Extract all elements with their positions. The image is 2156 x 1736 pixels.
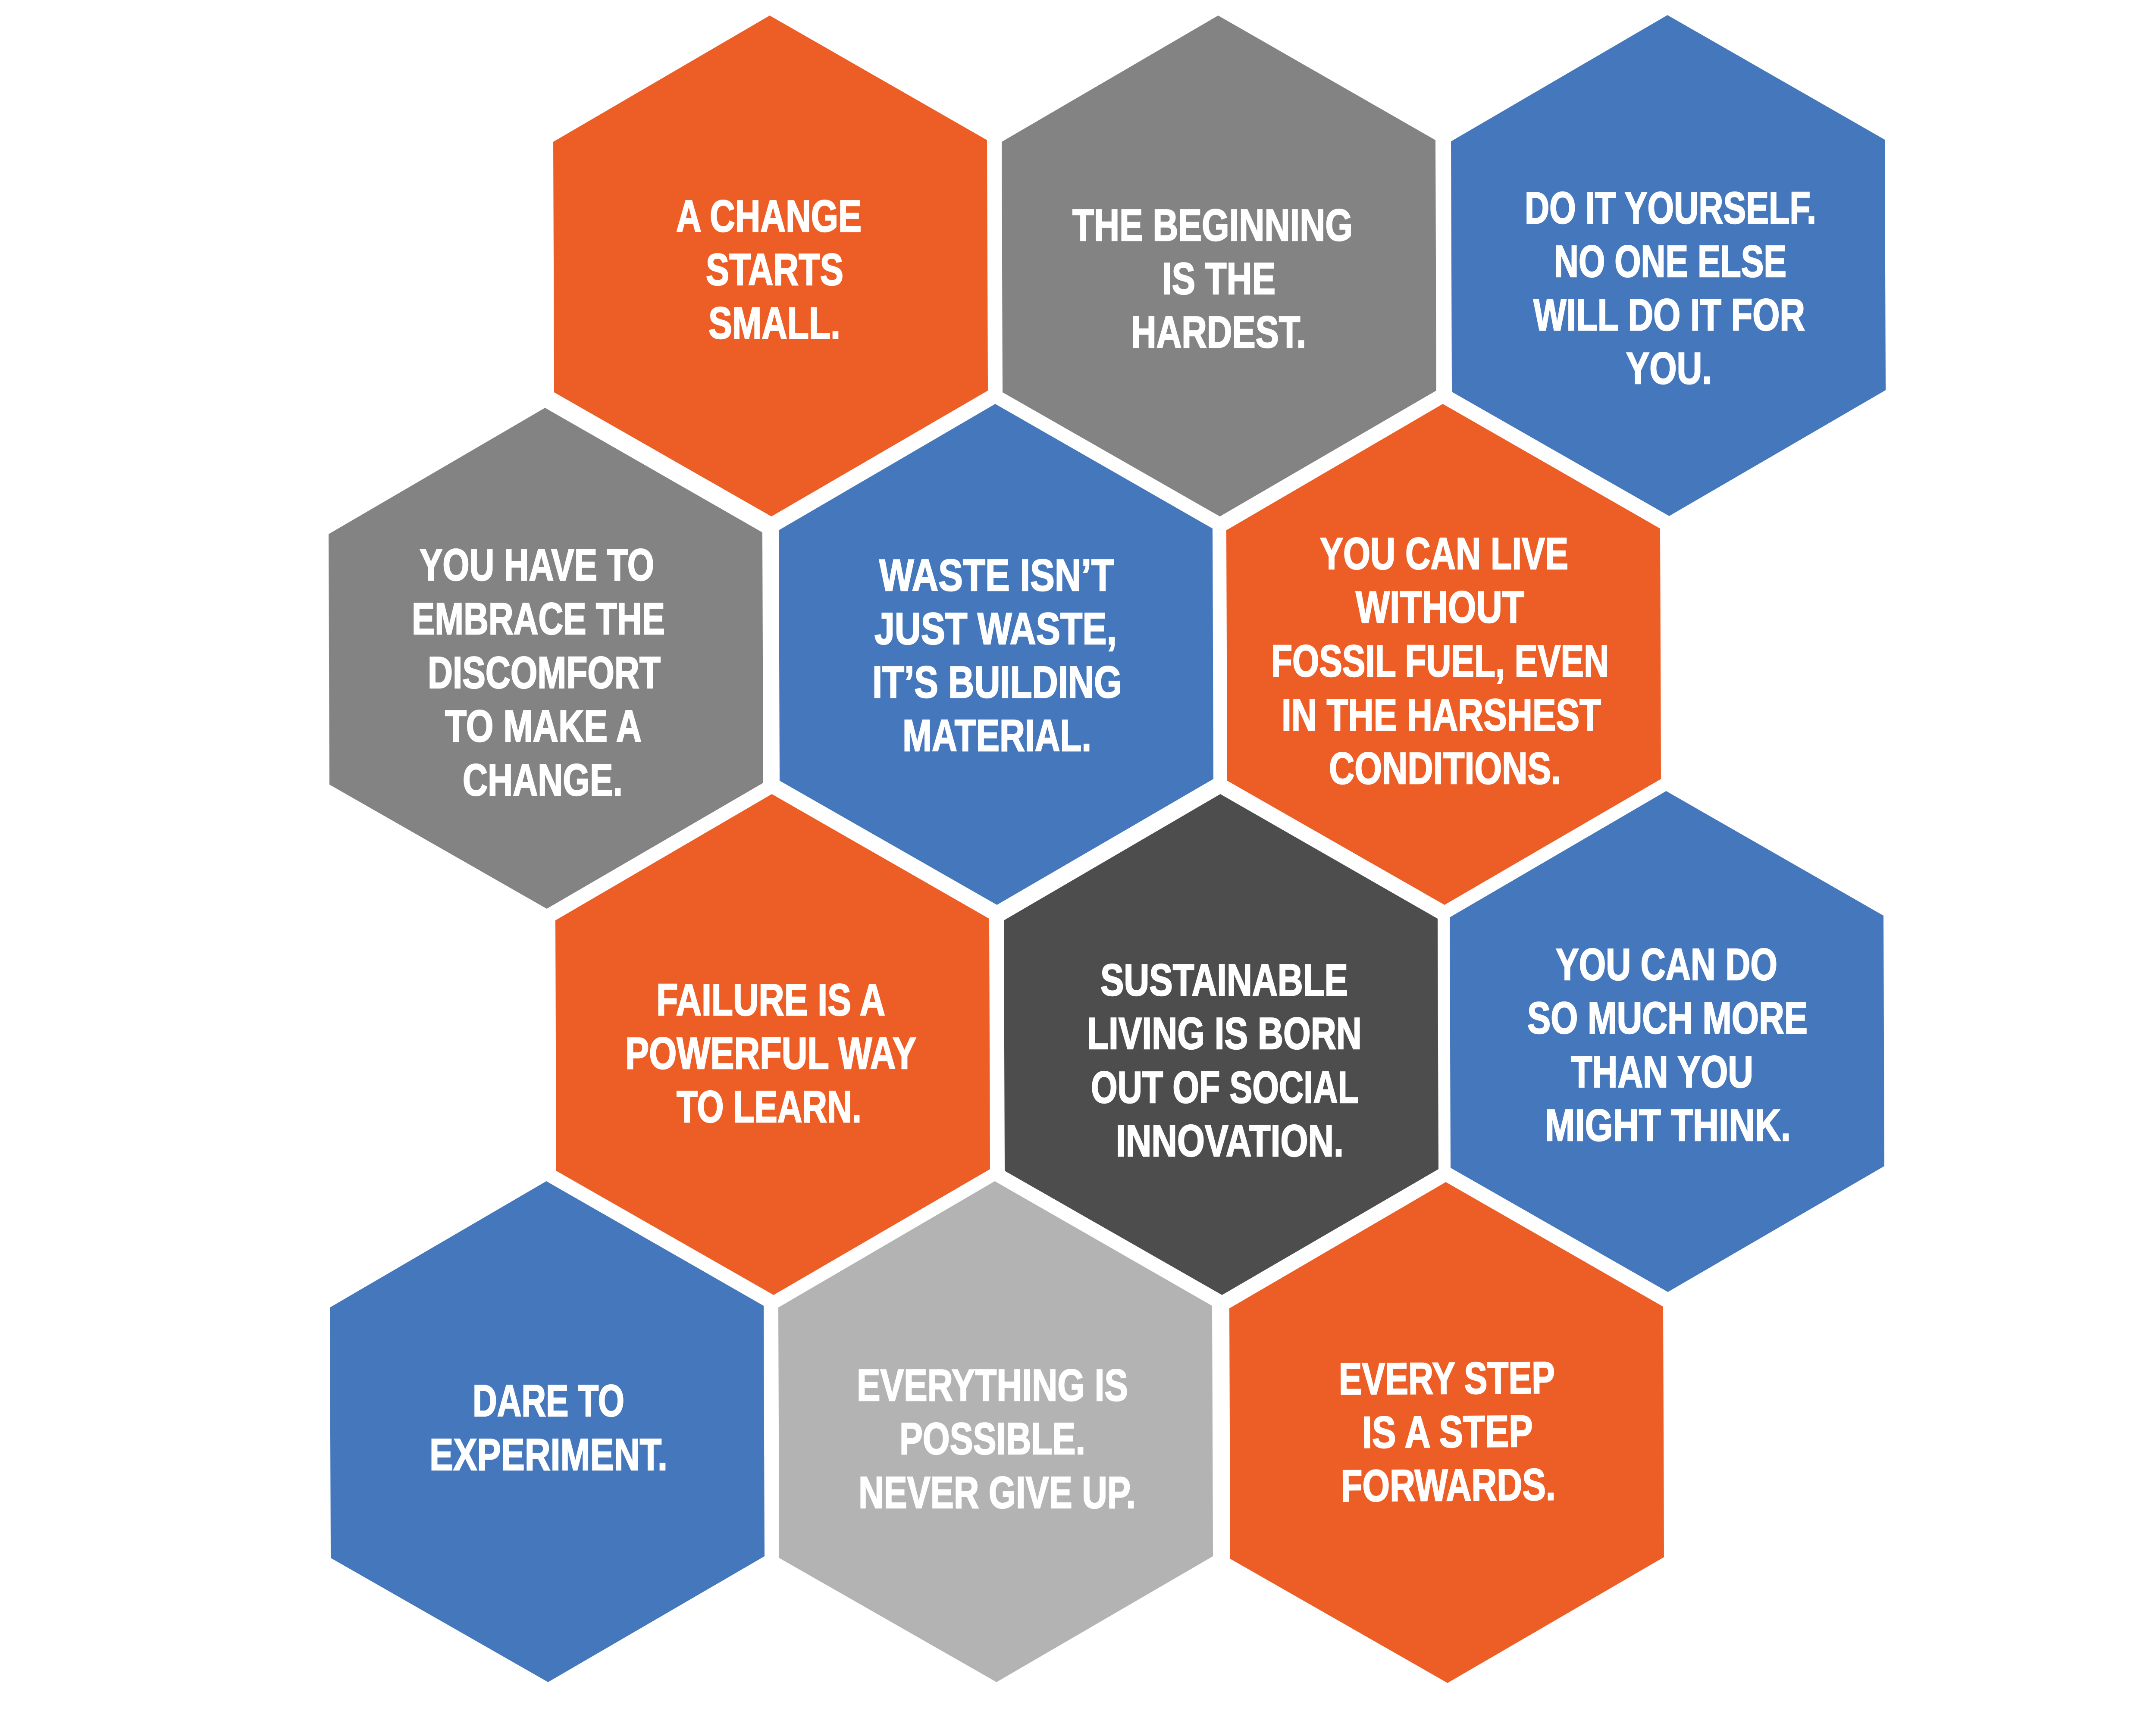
- text: live without fossil fuel: IN THE HARSHEST: [1282, 690, 1601, 740]
- text: dare to experiment: DARE TO: [473, 1376, 624, 1426]
- text: a change starts small: A CHANGE: [676, 191, 862, 241]
- text: sustainable living: SUSTAINABLE: [1100, 955, 1348, 1005]
- text: live without fossil fuel: [1271, 529, 1609, 794]
- text: every step is a step forwards: IS A STEP: [1362, 1407, 1533, 1458]
- text: the beginning is the hardest: IS THE: [1162, 254, 1275, 304]
- text: do it yourself: NO ONE ELSE: [1554, 237, 1786, 287]
- text: embrace the discomfort: DISCOMFORT: [428, 648, 661, 698]
- text: everything is possible: POSSIBLE.: [899, 1414, 1085, 1464]
- panel: sustainable living: [1004, 794, 1438, 1295]
- text: every step is a step forwards: [1338, 1353, 1556, 1511]
- panel: waste is building material: [779, 404, 1213, 905]
- text: the beginning is the hardest: THE BEGINNING: [1072, 200, 1353, 250]
- text: you can do so much more: SO MUCH MORE: [1527, 993, 1808, 1043]
- text: everything is possible: EVERYTHING IS: [857, 1361, 1128, 1411]
- text: everything is possible: NEVER GIVE UP.: [859, 1468, 1136, 1518]
- text: sustainable living: LIVING IS BORN: [1087, 1009, 1362, 1059]
- hexagon: blue: [1450, 791, 1884, 1292]
- hexagon: blue: [1451, 15, 1886, 516]
- text: waste is building material: MATERIAL.: [903, 711, 1091, 761]
- text: embrace the discomfort: CHANGE.: [463, 755, 623, 805]
- panel: a change starts small: [553, 16, 988, 516]
- text: sustainable living: [1087, 955, 1362, 1166]
- text: dare to experiment: EXPERIMENT.: [429, 1430, 667, 1480]
- hexagon: blue: [330, 1181, 765, 1682]
- text: the beginning is the hardest: HARDEST.: [1131, 307, 1306, 357]
- text: you can do so much more: YOU CAN DO: [1556, 940, 1777, 990]
- hexagon: blue: [779, 404, 1213, 905]
- text: embrace the discomfort: TO MAKE A: [445, 701, 642, 751]
- text: failure is a way to learn: [625, 975, 916, 1132]
- text: sustainable living: OUT OF SOCIAL: [1091, 1063, 1359, 1113]
- text: everything is possible: [857, 1361, 1136, 1518]
- hexagon: orange: [1229, 1182, 1664, 1683]
- text: failure is a way to learn: POWERFUL WAY: [625, 1029, 916, 1079]
- text: waste is building material: JUST WASTE,: [874, 604, 1117, 654]
- text: do it yourself: [1525, 183, 1816, 394]
- text: sustainable living: INNOVATION.: [1116, 1116, 1344, 1166]
- hexagon: gray: [1002, 16, 1436, 516]
- text: a change starts small: SMALL.: [708, 298, 840, 348]
- text: do it yourself: YOU.: [1626, 344, 1712, 394]
- panel: the beginning is the hardest: [1002, 16, 1436, 516]
- panel: everything is possible: [778, 1181, 1213, 1682]
- hexagon: dark gray: [1004, 794, 1438, 1295]
- panel: embrace the discomfort: [329, 408, 763, 909]
- text: dare to experiment: [429, 1376, 667, 1480]
- text: every step is a step forwards: FORWARDS.: [1341, 1460, 1556, 1511]
- text: live without fossil fuel: YOU CAN LIVE: [1320, 529, 1568, 579]
- text: embrace the discomfort: EMBRACE THE: [412, 594, 665, 644]
- text: live without fossil fuel: CONDITIONS.: [1329, 744, 1561, 794]
- text: failure is a way to learn: FAILURE IS A: [656, 975, 885, 1025]
- text: every step is a step forwards: EVERY STEP: [1338, 1353, 1555, 1404]
- text: embrace the discomfort: [412, 540, 665, 805]
- panel: dare to experiment: [330, 1181, 765, 1682]
- hexagon: gray: [329, 408, 763, 909]
- panel: live without fossil fuel: [1226, 404, 1661, 905]
- text: you can do so much more: [1527, 940, 1808, 1151]
- text: live without fossil fuel: FOSSIL FUEL, EVEN: [1271, 636, 1609, 686]
- hexagon: orange: [1226, 404, 1661, 905]
- panel: do it yourself: [1451, 15, 1886, 516]
- text: live without fossil fuel: WITHOUT: [1356, 582, 1524, 632]
- text: do it yourself: DO IT YOURSELF.: [1525, 183, 1816, 233]
- text: a change starts small: STARTS: [706, 245, 843, 295]
- text: waste is building material: [872, 551, 1122, 761]
- hexagon: orange: [555, 794, 990, 1295]
- text: embrace the discomfort: YOU HAVE TO: [420, 540, 654, 590]
- panel: you can do so much more: [1450, 791, 1884, 1292]
- text: waste is building material: IT’S BUILDING: [872, 657, 1122, 707]
- hexagon: orange: [553, 16, 988, 516]
- text: failure is a way to learn: TO LEARN.: [677, 1082, 862, 1132]
- text: you can do so much more: THAN YOU: [1571, 1047, 1753, 1097]
- text: do it yourself: WILL DO IT FOR: [1533, 290, 1805, 340]
- text: the beginning is the hardest: [1072, 200, 1353, 357]
- panel: failure is a way to learn: [555, 794, 990, 1295]
- text: you can do so much more: MIGHT THINK.: [1545, 1101, 1791, 1151]
- text: a change starts small: [676, 191, 862, 348]
- text: waste is building material: WASTE ISN’T: [879, 551, 1114, 601]
- hexagon: light gray: [778, 1181, 1213, 1682]
- panel: every step is a step forwards: [1229, 1182, 1664, 1683]
